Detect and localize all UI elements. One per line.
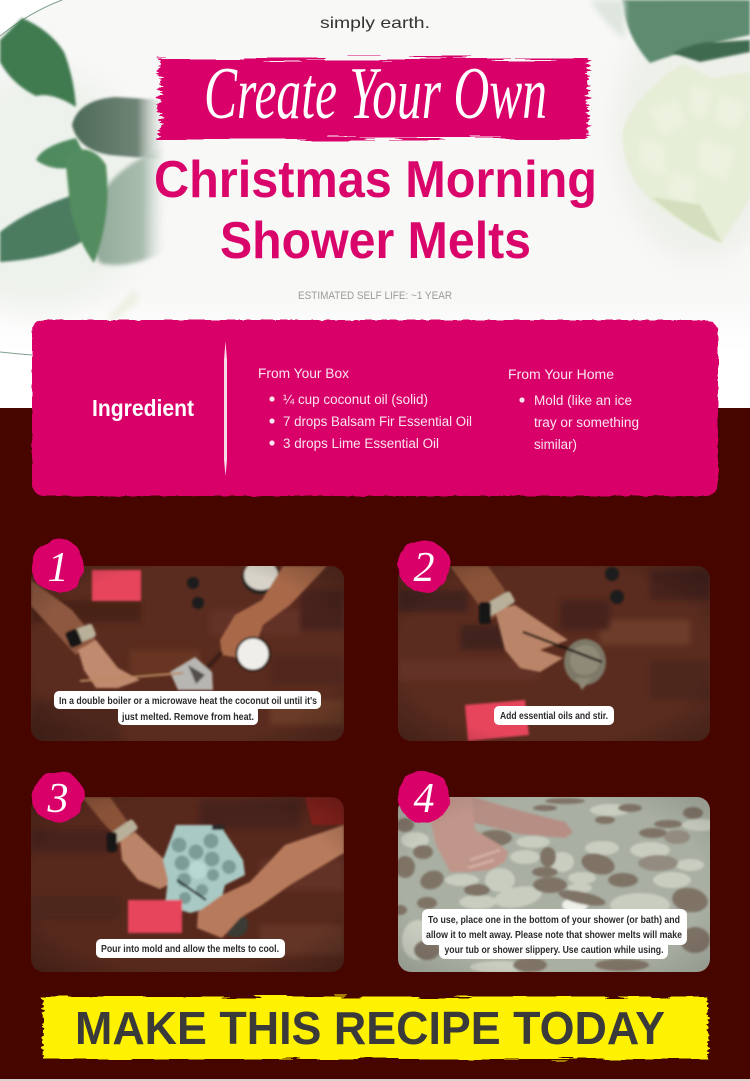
list: from your box: 7 drops Balsam Fir Essential Oil bbox=[283, 414, 472, 429]
list: from your box bbox=[258, 366, 472, 451]
step 2 badge: 2 bbox=[414, 545, 434, 591]
list: from your home: tray or something bbox=[534, 415, 639, 430]
step 4 caption: To use, place one in the bottom of your shower (or bath) and bbox=[428, 915, 680, 926]
step 4 caption: allow it to melt away. Please note that shower melts will make bbox=[426, 930, 682, 941]
step 2 caption: Add essential oils and stir. bbox=[500, 711, 608, 722]
brush stroke bbox=[160, 59, 588, 139]
script title: Create Your Own bbox=[204, 53, 547, 135]
banner text: MAKE THIS RECIPE TODAY bbox=[75, 1002, 665, 1054]
step 1 badge bbox=[32, 540, 84, 592]
heading: Ingredient: Ingredient bbox=[92, 395, 194, 421]
estimated shelf life: ESTIMATED SELF LIFE: ~1 YEAR bbox=[298, 290, 452, 302]
photo: eucalyptus leaves left bbox=[0, 18, 165, 320]
step 3 badge bbox=[32, 771, 84, 823]
panel background bbox=[32, 320, 718, 496]
step 4 photo bbox=[393, 797, 718, 973]
step 3 caption: Pour into mold and allow the melts to cool. bbox=[101, 944, 279, 955]
step 4 caption bbox=[422, 909, 687, 959]
logo: simply earth: simply earth. bbox=[320, 15, 430, 32]
step 1 photo bbox=[31, 560, 344, 741]
title: Christmas Morning Shower Melts: Christmas Morning bbox=[154, 151, 597, 209]
list: from your box: From Your Box bbox=[258, 366, 349, 381]
panel: ingredients bbox=[32, 320, 718, 496]
list: from your home: From Your Home bbox=[508, 367, 614, 382]
step 2 caption bbox=[494, 706, 614, 725]
step 1 caption: just melted. Remove from heat. bbox=[121, 712, 254, 723]
bottom edge strip bbox=[0, 1079, 750, 1081]
title: Christmas Morning Shower Melts bbox=[154, 151, 597, 270]
list: from your home bbox=[508, 367, 639, 452]
step 2 photo bbox=[398, 566, 710, 741]
photo: eucalyptus and shower melt right bbox=[590, 0, 750, 243]
step 3 photo bbox=[31, 797, 344, 972]
step 4 badge: 4 bbox=[414, 776, 434, 822]
step 1 badge: 1 bbox=[48, 545, 68, 591]
heading banner: Create Your Own bbox=[160, 53, 588, 139]
divider bbox=[224, 341, 227, 476]
list: from your home: similar) bbox=[534, 437, 577, 452]
header photo background bbox=[0, 0, 750, 408]
list: from your home: Mold (like an ice bbox=[534, 393, 632, 408]
step 1 caption bbox=[54, 691, 321, 725]
title: Christmas Morning Shower Melts: Shower Melts bbox=[220, 212, 531, 270]
step 3 badge: 3 bbox=[46, 776, 68, 822]
step 3 caption bbox=[96, 939, 285, 958]
list: from your box: 3 drops Lime Essential Oil bbox=[283, 436, 439, 451]
list: from your box: ¼ cup coconut oil (solid) bbox=[283, 392, 428, 407]
step 1 caption: In a double boiler or a microwave heat the coconut oil until it's bbox=[59, 696, 317, 707]
step 4 caption: your tub or shower slippery. Use caution while using. bbox=[444, 945, 664, 956]
step 2 badge bbox=[398, 540, 450, 592]
step 4 badge bbox=[398, 771, 450, 823]
yellow brush strip bbox=[43, 997, 708, 1059]
call to action banner bbox=[43, 997, 708, 1059]
